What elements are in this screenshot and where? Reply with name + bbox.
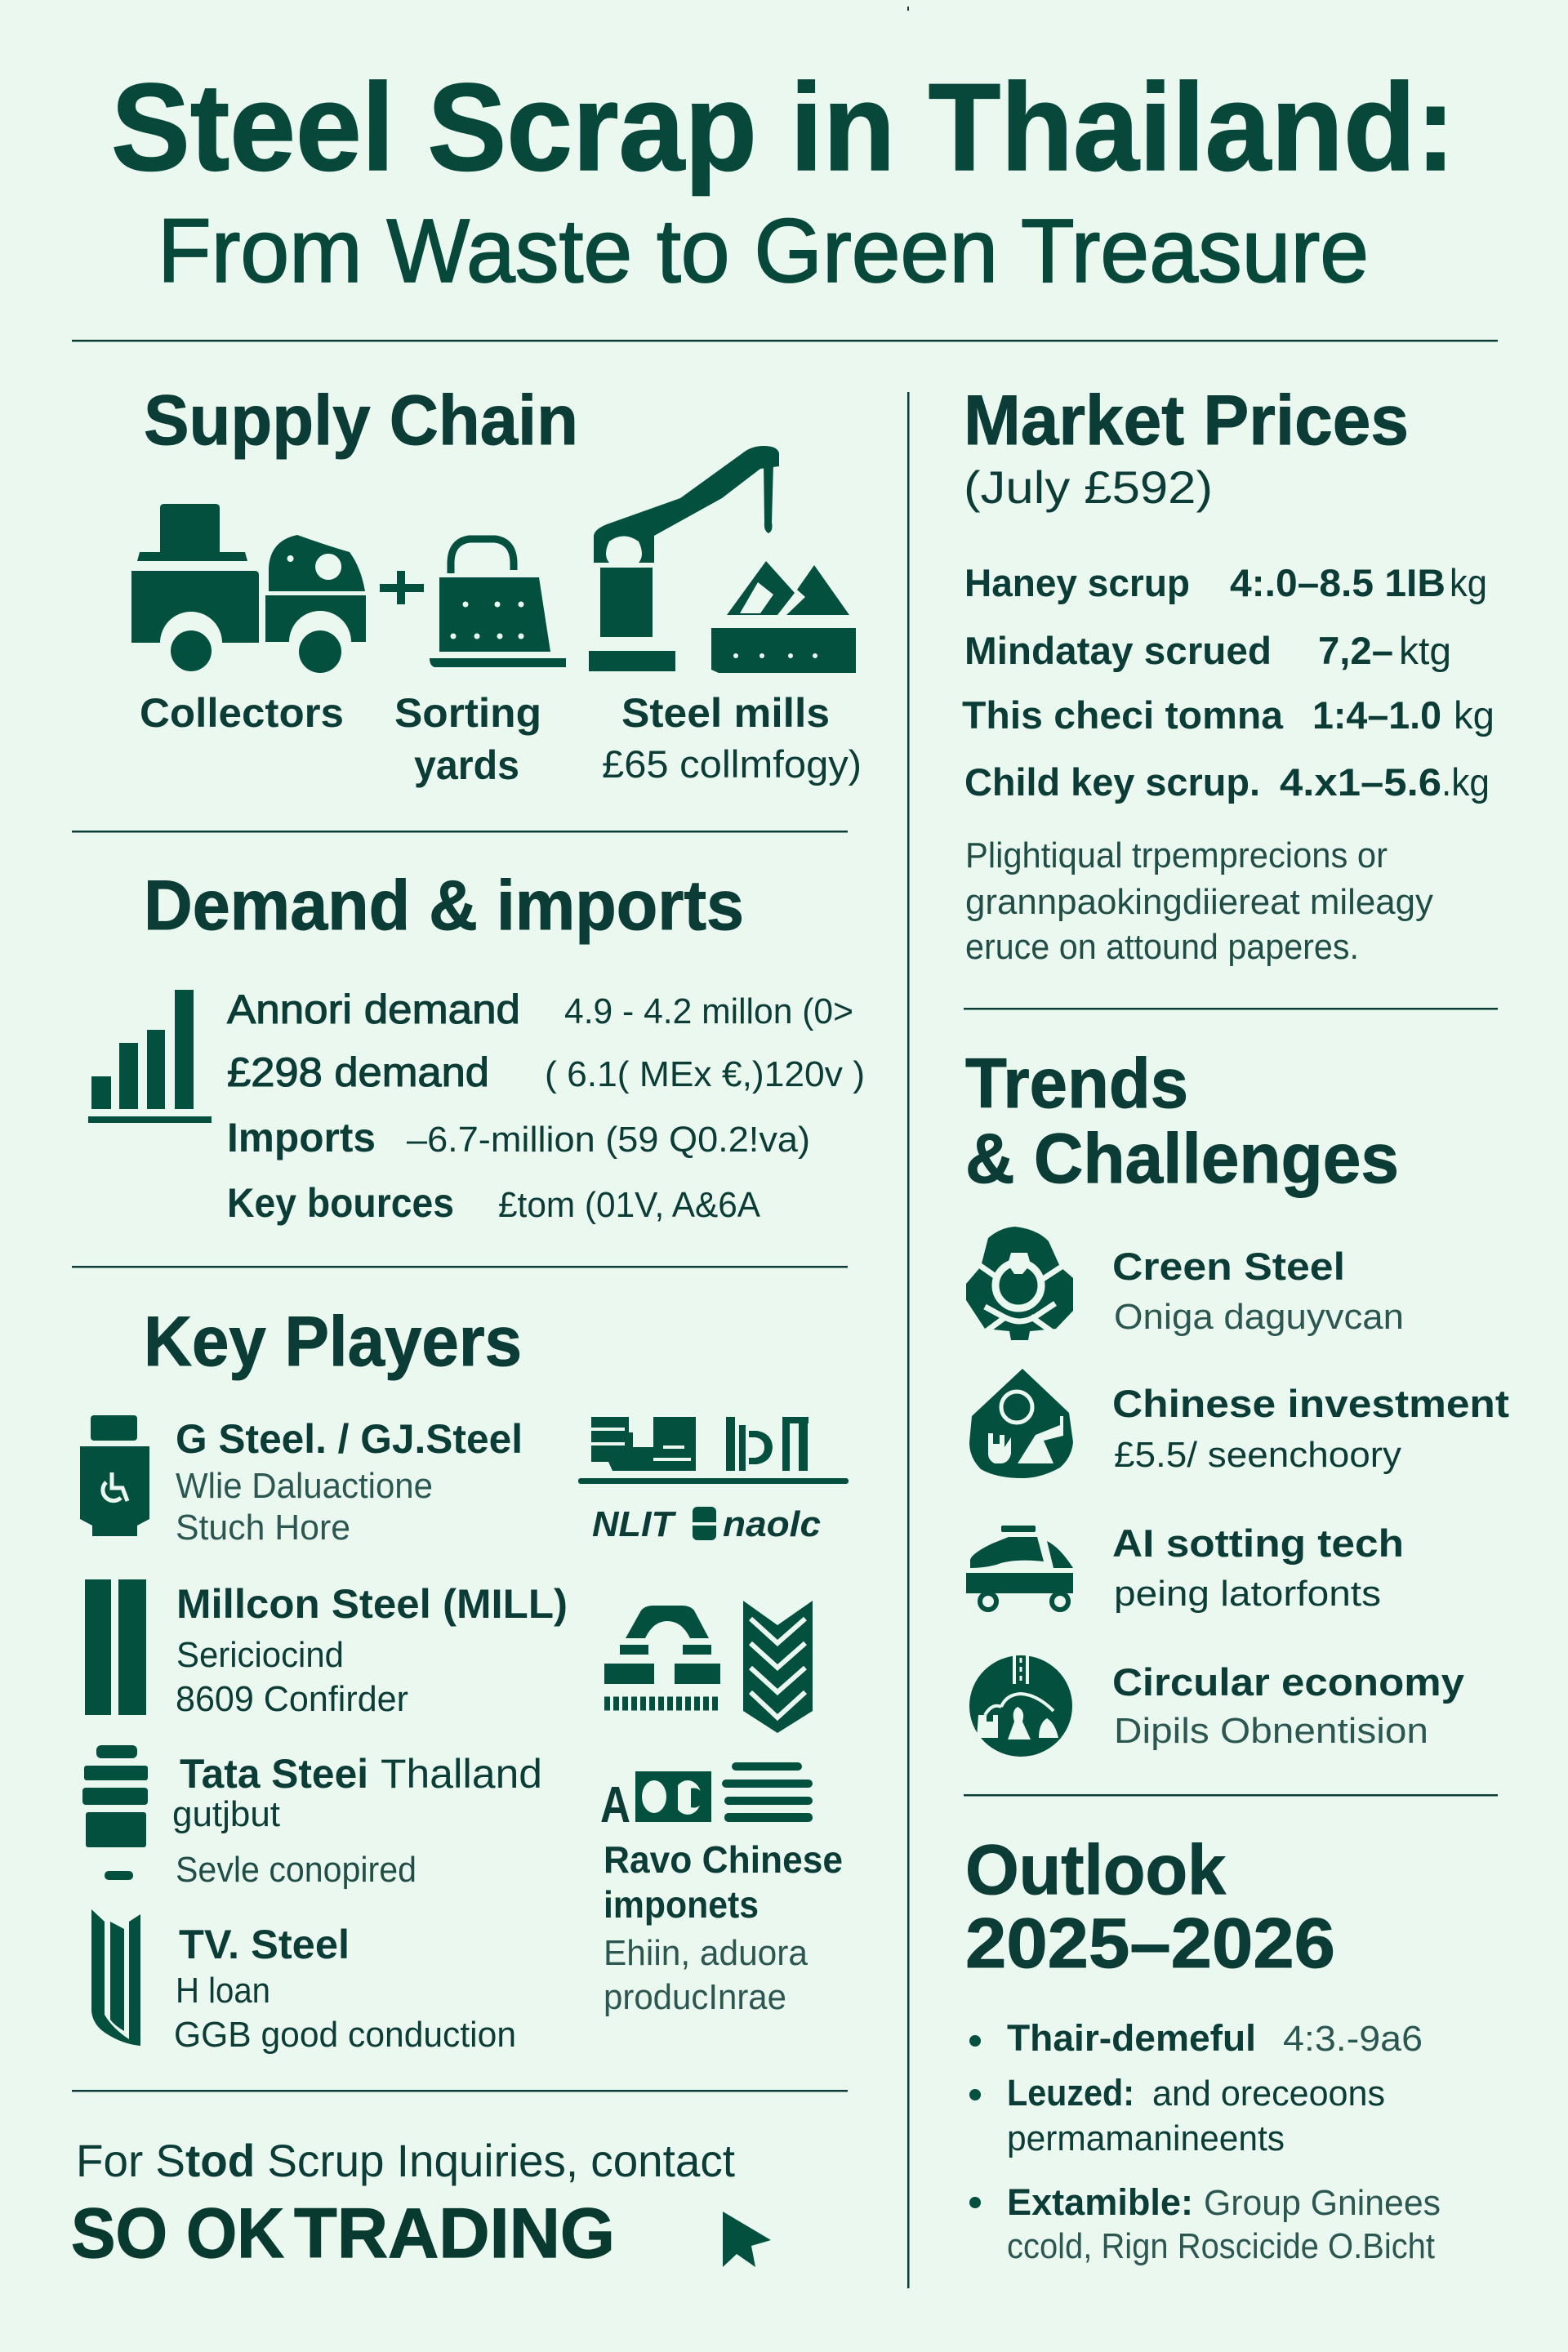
price rows: This checi tomna	[962, 693, 1284, 737]
price rows: ktg	[1399, 629, 1451, 672]
demand rows: –6.7-million (59 Q0.2!va)	[407, 1120, 810, 1160]
demand rows: Imports	[227, 1115, 376, 1160]
icon: circular economy: Dipils Obnentision	[1114, 1711, 1428, 1751]
bullet: extamible	[969, 2181, 1441, 2266]
label: steel mills: £65 collmfogy)	[602, 742, 862, 786]
player: Ravo Chinese imponets: Ehiin, aduora	[604, 1933, 808, 1973]
demand rows	[227, 987, 865, 1226]
player: Tata Steel Thailand: Sevle conopired	[176, 1850, 416, 1890]
bullet: leuzed: Leuzed:	[1007, 2072, 1134, 2114]
label: green steel: Creen Steel	[1112, 1245, 1345, 1288]
icon: plus	[380, 571, 424, 604]
player: TV Steel: GGB good conduction	[174, 2015, 516, 2055]
bullet: extamible: Extamible:	[1007, 2181, 1193, 2223]
price rows: kg	[1454, 693, 1494, 737]
price rows: Child key scrup.	[964, 760, 1260, 804]
price rows: Haney scrup	[964, 561, 1190, 604]
player: G Steel: G Steel. / GJ.Steel	[176, 1416, 523, 1462]
player: Tata Steel Thailand: Thalland	[381, 1751, 542, 1797]
player: G Steel	[80, 1415, 523, 1548]
player: Ravo Chinese imponets: A	[600, 1777, 630, 1833]
contact line: For Stod Scrup Inquiries, contact	[76, 2135, 735, 2186]
player: TV Steel: TV. Steel	[179, 1922, 350, 1967]
player: Tata Steel Thailand: Tata Steei	[180, 1751, 368, 1797]
bullet: leuzed	[969, 2072, 1385, 2158]
heading: trends and challenges	[965, 1045, 1399, 1198]
player: Ravo Chinese imponets: imponets	[604, 1883, 759, 1926]
icon: green steel	[966, 1227, 1404, 1340]
bullet: leuzed: permamanineents	[1007, 2118, 1285, 2158]
icon: AI sorting vehicle: peing latorfonts	[1114, 1574, 1381, 1614]
demand rows: 4.9 - 4.2 millon (0>	[564, 991, 853, 1031]
panel: supply chain	[131, 381, 862, 788]
panel: market prices	[962, 381, 1494, 967]
price rows: kg	[1450, 561, 1487, 604]
price rows: .kg	[1441, 760, 1490, 804]
main title: Steel Scrap in Thailand:	[111, 58, 1455, 197]
icon: crane and scrap pile	[589, 446, 856, 673]
bullet: extamible: Group Gninees	[1204, 2183, 1441, 2223]
label: collectors: Collectors	[140, 690, 344, 736]
label: sorting yards: Sorting	[394, 690, 541, 736]
icon: sorting yard bag	[430, 539, 566, 667]
company name: OK	[186, 2194, 284, 2273]
subtitle: From Waste to Green Treasure	[158, 201, 1369, 301]
player: Ravo Chinese imponets: producInrae	[604, 1977, 786, 2017]
icon: AI sorting vehicle	[966, 1521, 1404, 1614]
heading: outlook: 2025–2026	[965, 1904, 1335, 1983]
label: steel mills	[602, 690, 862, 786]
icon: chinese investment: £5.5/ seenchoory	[1114, 1435, 1401, 1475]
price rows: 4:.0–8.5 1IB	[1230, 561, 1446, 604]
demand rows: Key bources	[227, 1180, 454, 1226]
heading: trends and challenges: & Challenges	[965, 1120, 1399, 1198]
player: Tata Steel Thailand: gutjbut	[172, 1794, 280, 1834]
company name: SO	[71, 2194, 167, 2273]
heading: trends and challenges: Trends	[965, 1045, 1188, 1123]
heading: market prices: Market Prices	[964, 381, 1409, 460]
label: circular economy: Circular economy	[1112, 1660, 1464, 1704]
demand rows: Annori demand	[227, 987, 520, 1032]
icon: cursor arrow	[723, 2212, 771, 2267]
price note: eruce on attound paperes.	[965, 927, 1359, 967]
panel: contact footer	[71, 2135, 771, 2273]
price note: Plightiqual trpemprecions or	[965, 835, 1388, 875]
icon: chinese investment	[969, 1369, 1509, 1478]
player: Ravo Chinese imponets	[600, 1762, 843, 2017]
bullet: demand	[969, 2017, 1423, 2059]
label: sorting yards	[394, 690, 541, 788]
player: Ravo Chinese imponets: Ravo Chinese	[604, 1838, 843, 1881]
label: sorting yards: yards	[414, 742, 519, 788]
player: TV Steel: H loan	[176, 1971, 270, 2011]
heading: demand and imports: Demand & imports	[144, 866, 744, 945]
price rows: Mindatay scrued	[964, 629, 1272, 672]
title block	[111, 58, 1455, 301]
player: G Steel: Stuch Hore	[176, 1508, 350, 1548]
bar chart icon	[88, 990, 212, 1123]
bullet: leuzed: and oreceoons	[1152, 2074, 1385, 2114]
icon: circular economy	[969, 1653, 1464, 1757]
logos: steel brands	[578, 1417, 849, 1544]
demand rows: £tom (01V, A&6A	[498, 1185, 761, 1225]
demand rows: ( 6.1( MEx €,)120v )	[545, 1054, 865, 1094]
bullet: demand: 4:3.-9a6	[1283, 2019, 1423, 2059]
player: Millcon Steel: 8609 Confirder	[176, 1679, 408, 1719]
logos: steel brands: naolc	[723, 1504, 821, 1544]
company name	[71, 2194, 615, 2273]
panel: trends and challenges	[965, 1045, 1509, 1757]
heading: key players: Key Players	[144, 1303, 522, 1381]
bullet: demand: Thair-demeful	[1007, 2017, 1256, 2059]
label: AI sorting tech: AI sotting tech	[1112, 1521, 1404, 1565]
heading: outlook	[965, 1831, 1335, 1983]
label: chinese investment: Chinese investment	[1112, 1382, 1509, 1425]
icon: green steel: Oniga daguyvcan	[1114, 1297, 1404, 1337]
date note: (July £592)	[964, 461, 1213, 513]
player: Tata Steel Thailand	[82, 1745, 542, 1890]
player: Millcon Steel: Millcon Steel (MILL)	[176, 1581, 568, 1627]
company name: TRADING	[294, 2194, 615, 2273]
logos: arch and chevron	[604, 1601, 813, 1733]
price rows: 7,2–	[1318, 629, 1393, 672]
icon: collector truck	[131, 504, 366, 673]
panel: demand and imports	[88, 866, 865, 1226]
panel: outlook	[965, 1831, 1441, 2266]
logos: steel brands: NLIT	[592, 1504, 676, 1544]
price rows	[962, 561, 1494, 804]
price rows: 4.x1–5.6	[1280, 760, 1441, 804]
price note: grannpaokingdiiereat mileagy	[965, 882, 1433, 922]
player: Millcon Steel	[85, 1579, 568, 1719]
label: steel mills: Steel mills	[621, 690, 830, 736]
bullet: extamible: ccold, Rign Roscicide O.Bicht	[1007, 2226, 1435, 2266]
price rows: 1:4–1.0	[1312, 693, 1441, 737]
player: G Steel: Wlie Daluactione	[176, 1466, 433, 1506]
player: TV Steel	[91, 1909, 516, 2055]
heading: supply chain: Supply Chain	[144, 381, 578, 460]
demand rows: £298 demand	[227, 1049, 489, 1095]
player: Millcon Steel: Sericiocind	[176, 1635, 344, 1675]
heading: outlook: Outlook	[965, 1831, 1226, 1909]
price note	[965, 835, 1433, 967]
panel: key players	[80, 1303, 849, 2055]
